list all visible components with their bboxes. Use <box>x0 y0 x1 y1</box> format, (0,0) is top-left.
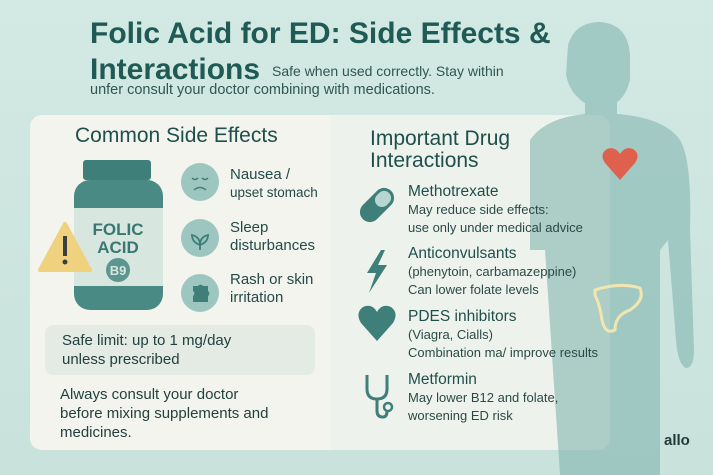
text: pde5 inhibitors: Combination ma/ improve results <box>408 344 598 360</box>
text: metformin: Metformin <box>408 371 477 388</box>
icons: side effect circles <box>181 163 219 312</box>
text: anticonvulsants: (phenytoin, carbamazeppine) <box>408 264 576 279</box>
heading: drug interactions: Interactions <box>370 149 479 172</box>
text: side effects list: Nausea / <box>230 166 290 183</box>
text: anticonvulsants: Can lower folate levels <box>408 282 539 296</box>
heading: common side effects: Common Side Effects <box>75 124 278 147</box>
icon: folic acid bottle <box>38 160 163 310</box>
text: consult note: before mixing supplements and <box>60 405 268 422</box>
text: metformin <box>408 371 558 422</box>
text: methotrexate: Methotrexate <box>408 183 498 200</box>
text: metformin: May lower B12 and folate, <box>408 390 558 405</box>
icon: heart on body <box>602 148 638 180</box>
text: methotrexate: May reduce side effects: <box>408 202 549 217</box>
callout: safe limit <box>45 325 315 375</box>
panel: left section <box>30 115 330 450</box>
subtitle: Safe when used correctly. Stay within <box>272 63 504 79</box>
icons: interaction icons <box>358 188 396 418</box>
text: irritation <box>230 289 283 306</box>
callout: safe limit: Safe limit: up to 1 mg/day <box>62 332 231 349</box>
text: Interactions <box>90 53 260 86</box>
logo: allo <box>664 432 690 449</box>
icon: folic acid bottle: ACID <box>97 238 139 257</box>
text: unfer consult your doctor combining with medications. <box>90 82 435 98</box>
text: side effects list: upset stomach <box>230 185 318 200</box>
text: pde5 inhibitors: PDES inhibitors <box>408 308 517 325</box>
text: methotrexate <box>408 183 583 234</box>
text: metformin: worsening ED risk <box>408 408 513 422</box>
text: consult note <box>60 386 268 441</box>
text: side effects list <box>230 166 318 200</box>
text: methotrexate: use only under medical advice <box>408 220 583 234</box>
text: disturbances <box>230 237 315 254</box>
text: anticonvulsants: Anticonvulsants <box>408 245 517 262</box>
callout: safe limit: unless prescribed <box>62 351 180 368</box>
heading: drug interactions: Important Drug <box>370 127 510 150</box>
text: Rash or skin <box>230 271 313 288</box>
text: Sleep <box>230 219 268 236</box>
text: consult note: medicines. <box>60 424 132 441</box>
heading: drug interactions <box>370 127 510 172</box>
text: anticonvulsants <box>408 245 576 296</box>
text: pde5 inhibitors <box>408 308 598 360</box>
text: consult note: Always consult your doctor <box>60 386 238 403</box>
icon: folic acid bottle: FOLIC <box>92 220 144 239</box>
panel: main card <box>30 115 610 450</box>
icon: organ outline <box>594 284 643 333</box>
icon: folic acid bottle: B9 <box>110 263 126 278</box>
text: pde5 inhibitors: (Viagra, Cialls) <box>408 327 493 342</box>
title: Folic Acid for ED: Side Effects & <box>90 17 551 50</box>
icon: warning triangle <box>40 224 90 270</box>
